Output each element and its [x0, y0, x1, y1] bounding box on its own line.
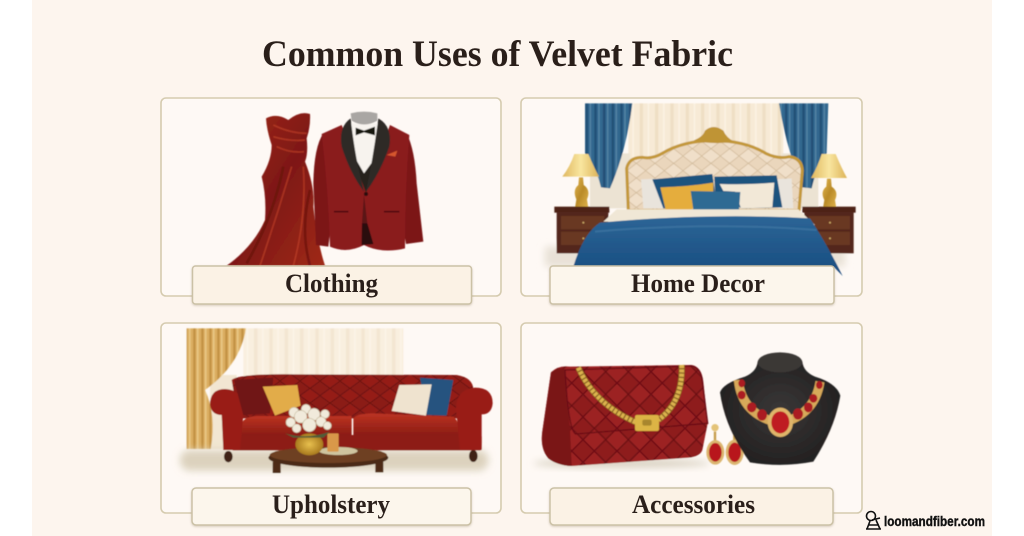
- clothing label: Clothing: [285, 269, 378, 298]
- sofa: [210, 374, 493, 462]
- icon: burgundy tuxedo jacket: [313, 112, 423, 251]
- illustration: bed with curtains: [545, 103, 856, 276]
- panel: accessories: [521, 323, 862, 525]
- title: Common Uses of Velvet Fabric: [262, 34, 733, 75]
- home decor label: Home Decor: [631, 269, 765, 298]
- blue curtain right: [779, 103, 828, 188]
- mattress sheet: [603, 209, 815, 225]
- panel: upholstery: [161, 323, 501, 525]
- white roses: [285, 404, 331, 438]
- coffee table: [268, 447, 388, 473]
- watermark: [866, 512, 985, 529]
- pale back drapes: [243, 328, 403, 377]
- pale side wall behind curtains: [590, 153, 630, 208]
- accessories label: Accessories: [632, 490, 755, 519]
- clothing frame: [161, 98, 501, 296]
- sofa pillows: [234, 378, 453, 416]
- icon: quilted velvet handbag: [533, 365, 710, 468]
- right nightstand: [802, 207, 856, 253]
- illustration: dress and tuxedo jacket: [227, 112, 423, 266]
- accessories frame: [521, 323, 862, 513]
- illustration: red sofa with table: [180, 328, 493, 473]
- home decor label: [550, 266, 834, 304]
- floor shading: [545, 247, 845, 267]
- panel: home decor: [521, 98, 862, 304]
- gold curtain: [187, 328, 246, 449]
- cream back drapes: [628, 103, 783, 212]
- icon: necklace bust: [720, 352, 840, 465]
- clothing label: [192, 266, 472, 304]
- upholstery label: [192, 488, 471, 525]
- pillows: [641, 174, 793, 210]
- icon: red velvet gown: [227, 113, 325, 266]
- icon: ruby necklace: [738, 379, 823, 437]
- left lamp: [562, 154, 599, 208]
- upholstery frame: [161, 323, 501, 513]
- icon: ruby earrings: [706, 423, 744, 465]
- blue velvet blanket: [573, 216, 843, 276]
- panel: clothing: [161, 98, 501, 304]
- home decor frame: [521, 98, 862, 296]
- gold vase: [295, 433, 323, 455]
- gold crest: [693, 127, 734, 143]
- blue curtain left: [585, 103, 632, 188]
- accessories label: [550, 488, 833, 525]
- right lamp: [811, 154, 847, 208]
- plate and glass: [319, 433, 358, 455]
- upholstery label: Upholstery: [272, 490, 390, 519]
- tufted headboard: [627, 141, 802, 211]
- blanket fold highlight: [595, 226, 817, 232]
- icon: spinning wheel logo: [866, 512, 881, 529]
- rug: [180, 450, 488, 471]
- left nightstand: [554, 207, 609, 253]
- illustration: handbag and jewelry: [533, 352, 840, 468]
- site name: loomandfiber.com: [884, 513, 985, 529]
